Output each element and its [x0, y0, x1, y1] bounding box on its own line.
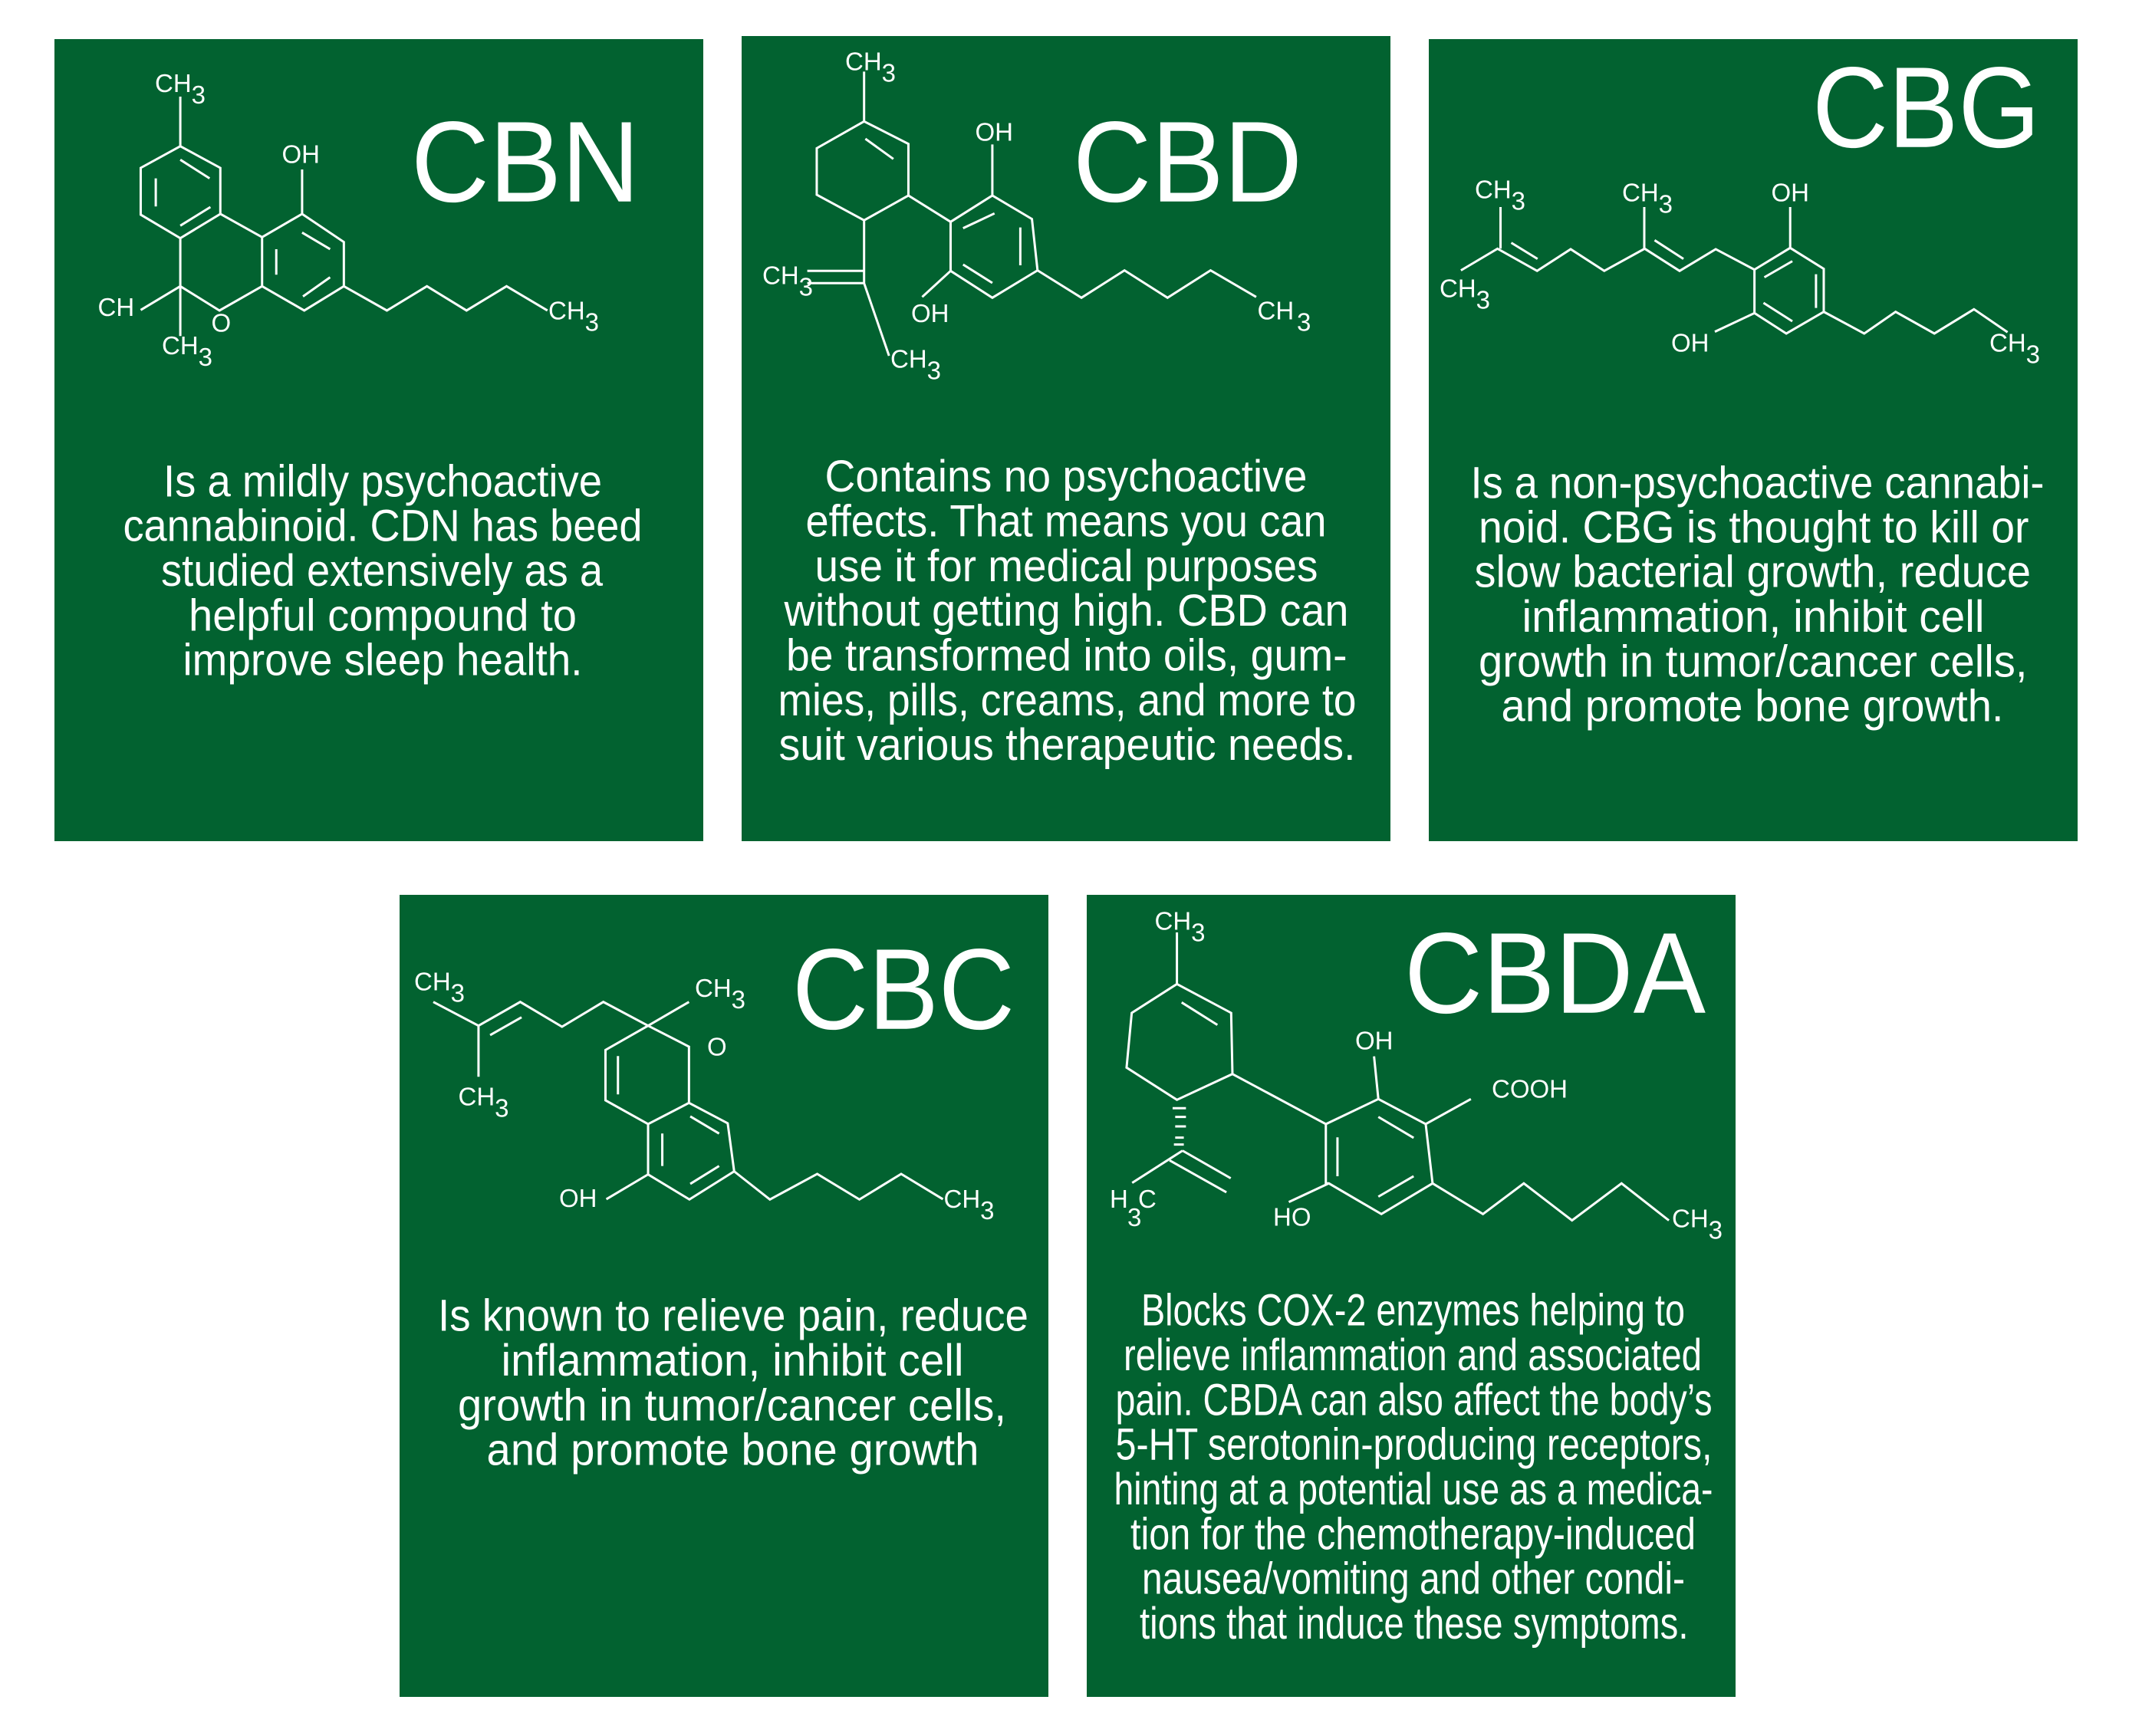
molecule: CBDA structure: 3 — [1127, 1203, 1141, 1231]
text block: CBDA description: nausea/vomiting and other condi- — [1142, 1554, 1685, 1604]
molecule: CBC structure: OH — [559, 1184, 597, 1212]
text block: CBG description: noid. CBG is thought to kill or — [1479, 502, 2029, 552]
molecule: CBG structure: OH — [1671, 328, 1709, 357]
molecule: CBG structure: CH — [1622, 178, 1659, 206]
text block: CBD description — [778, 452, 1356, 770]
molecule: CBD structure: 3 — [799, 273, 813, 301]
molecule: CBC structure: 3 — [732, 985, 745, 1014]
molecule: CBDA structure: COOH — [1492, 1075, 1568, 1103]
panel: CBD — [742, 36, 1390, 841]
text block: CBN description: improve sleep health. — [183, 636, 583, 686]
text block: CBDA description: tions that induce these symptoms. — [1140, 1599, 1689, 1649]
molecule: CBG structure: OH — [1772, 178, 1809, 206]
text block: CBD description: use it for medical purposes — [814, 541, 1318, 591]
molecule: CBC structure: CH — [459, 1083, 495, 1111]
molecule: CBN structure: 3 — [192, 81, 206, 109]
panel: CBN — [54, 39, 703, 841]
molecule: CBG structure: 3 — [2026, 340, 2040, 368]
molecule: CBN structure: CH — [98, 293, 134, 321]
molecule: CBC structure: 3 — [980, 1196, 995, 1225]
molecule: CBD structure: CH — [845, 48, 882, 76]
text block: CBD description: effects. That means you can — [805, 497, 1327, 546]
text block: CBG description: Is a non-psychoactive cannabi- — [1471, 458, 2045, 508]
molecule: CBDA structure: OH — [1355, 1026, 1393, 1054]
molecule: CBN structure: CH — [162, 331, 199, 360]
text block: CBD description: without getting high. CBD can — [784, 586, 1348, 636]
text block: CBDA description — [1114, 1286, 1713, 1649]
molecule: CBC structure: 3 — [451, 979, 465, 1008]
molecule: CBG structure: CH — [1440, 274, 1476, 302]
molecule: CBG structure: CH — [1989, 328, 2026, 357]
molecule: CBG structure: 3 — [1512, 186, 1525, 215]
text block: CBG description: slow bacterial growth, reduce — [1474, 547, 2031, 597]
molecule: CBN structure: 3 — [585, 308, 599, 337]
molecule: CBN structure: CH — [548, 297, 585, 325]
heading: CBC: CBC — [792, 925, 1015, 1054]
molecule: CBD structure: CH — [1258, 297, 1294, 325]
text block: CBD description: be transformed into oils, gum- — [786, 630, 1347, 681]
text block: CBC description: growth in tumor/cancer cells, — [458, 1380, 1006, 1430]
text block: CBD description: suit various therapeutic needs. — [779, 720, 1356, 770]
heading: CBN: CBN — [411, 97, 640, 226]
molecule: CBD structure: CH — [762, 261, 799, 290]
molecule: CBD structure — [762, 48, 1311, 384]
molecule: CBC structure: CH — [414, 968, 451, 996]
panel: CBC — [400, 895, 1048, 1697]
molecule: CBN structure: CH — [155, 69, 192, 97]
heading: CBD: CBD — [1073, 97, 1302, 226]
heading: CBG: CBG — [1812, 43, 2040, 172]
text block: CBN description: Is a mildly psychoactive — [163, 456, 602, 506]
molecule: CBC structure: O — [707, 1033, 727, 1061]
molecule: CBG structure: CH — [1475, 175, 1512, 203]
text block: CBN description: studied extensively as a — [161, 546, 604, 596]
molecule: CBG structure: 3 — [1476, 285, 1490, 314]
molecule: CBDA structure: HO — [1273, 1202, 1311, 1231]
molecule: CBC structure: CH — [695, 974, 732, 1002]
molecule: CBD structure: 3 — [927, 356, 941, 384]
text block: CBC description — [438, 1291, 1028, 1475]
molecule: CBN structure: OH — [282, 140, 320, 169]
text block: CBG description: growth in tumor/cancer cells, — [1479, 636, 2028, 686]
text block: CBN description: helpful compound to — [189, 590, 577, 640]
molecule: CBDA structure: H — [1110, 1185, 1128, 1213]
molecule: CBG structure: 3 — [1659, 189, 1673, 218]
molecule: CBDA structure: C — [1138, 1185, 1157, 1213]
text block: CBN description — [123, 456, 643, 686]
molecule: CBN structure: 3 — [199, 343, 212, 371]
molecule: CBD structure: OH — [976, 117, 1013, 146]
text block: CBDA description: hinting at a potential use as a medica- — [1114, 1465, 1713, 1514]
panel: CBG — [1429, 39, 2078, 841]
molecule: CBD structure: 3 — [882, 59, 896, 87]
heading: CBDA: CBDA — [1404, 909, 1706, 1037]
molecule: CBC structure — [414, 968, 995, 1225]
molecule: CBDA structure: CH — [1155, 906, 1191, 935]
molecule: CBD structure: 3 — [1297, 308, 1311, 337]
text block: CBDA description: pain. CBDA can also affect the body’s — [1115, 1375, 1712, 1425]
text block: CBDA description: relieve inflammation and associated — [1124, 1330, 1702, 1380]
molecule: CBC structure: CH — [943, 1185, 980, 1213]
text block: CBG description: and promote bone growth. — [1502, 682, 2003, 732]
molecule: CBDA structure: CH — [1672, 1205, 1709, 1233]
text block: CBDA description: Blocks COX-2 enzymes helping to — [1141, 1286, 1685, 1336]
text block: CBDA description: 5-HT serotonin-producing receptors, — [1115, 1420, 1712, 1470]
molecule: CBC structure: 3 — [495, 1094, 509, 1123]
molecule: CBDA structure: 3 — [1191, 918, 1206, 946]
molecule: CBDA structure: 3 — [1709, 1216, 1723, 1244]
text block: CBD description: mies, pills, creams, and more to — [778, 676, 1356, 725]
molecule: CBD structure: CH — [890, 344, 927, 373]
molecule: CBDA structure — [1110, 906, 1723, 1244]
text block: CBD description: Contains no psychoactive — [825, 452, 1307, 501]
text block: CBC description: Is known to relieve pain, reduce — [438, 1291, 1028, 1341]
molecule: CBD structure: OH — [911, 299, 949, 327]
text block: CBC description: inflammation, inhibit cell — [502, 1336, 963, 1386]
molecule: CBN structure: O — [212, 309, 231, 337]
text block: CBN description: cannabinoid. CDN has beed — [123, 501, 643, 551]
molecule: CBN structure — [98, 69, 599, 371]
text block: CBDA description: tion for the chemotherapy-induced — [1130, 1509, 1696, 1559]
panel: CBDA — [1087, 895, 1736, 1697]
text block: CBG description: inflammation, inhibit cell — [1522, 592, 1985, 642]
molecule: CBG structure — [1440, 175, 2040, 368]
text block: CBC description: and promote bone growth — [486, 1425, 979, 1475]
text block: CBG description — [1471, 458, 2045, 732]
